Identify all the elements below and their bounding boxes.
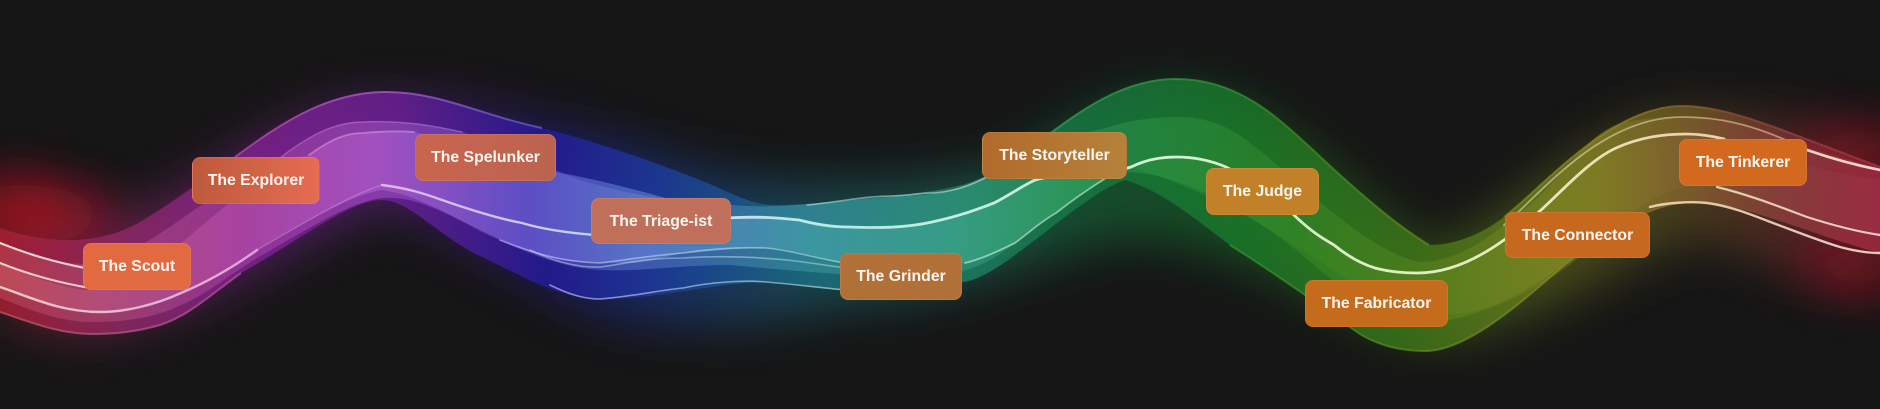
main bright line [725, 134, 1724, 273]
teal and blue lines [500, 178, 1106, 299]
label: The Explorer [192, 157, 320, 204]
label: The Tinkerer: The Tinkerer [1696, 154, 1790, 171]
label: The Triage-ist [591, 198, 731, 244]
label: The Connector [1505, 212, 1650, 258]
label: The Triage-ist: The Triage-ist [610, 212, 712, 230]
label: The Spelunker [415, 134, 556, 181]
label: The Judge [1206, 168, 1319, 215]
label: The Spelunker: The Spelunker [431, 149, 540, 166]
label: The Fabricator [1305, 280, 1448, 327]
label: The Scout: The Scout [99, 258, 175, 275]
ribbon highlight lines [0, 117, 1880, 312]
green and olive inner band [1131, 134, 1880, 314]
left lines [0, 185, 382, 312]
label: The Storyteller: The Storyteller [999, 147, 1110, 164]
ribbon outer edge highlights [0, 79, 1880, 351]
olive and red lines [1504, 117, 1880, 253]
ribbon upper layer [0, 117, 1880, 322]
label: The Explorer: The Explorer [208, 172, 304, 189]
label: The Judge: The Judge [1223, 183, 1302, 200]
ribbon outer band [0, 79, 1880, 351]
ribbon glow [0, 90, 1880, 340]
pink and violet arcs [281, 122, 595, 235]
label: The Fabricator: The Fabricator [1322, 295, 1431, 312]
ribbon bright core [0, 131, 1131, 312]
label: The Scout [83, 243, 191, 290]
label: The Tinkerer [1679, 139, 1807, 186]
label: The Grinder: The Grinder [856, 268, 946, 285]
label: The Connector: The Connector [1522, 226, 1633, 244]
label: The Storyteller [982, 132, 1127, 179]
label: The Grinder [840, 253, 962, 300]
